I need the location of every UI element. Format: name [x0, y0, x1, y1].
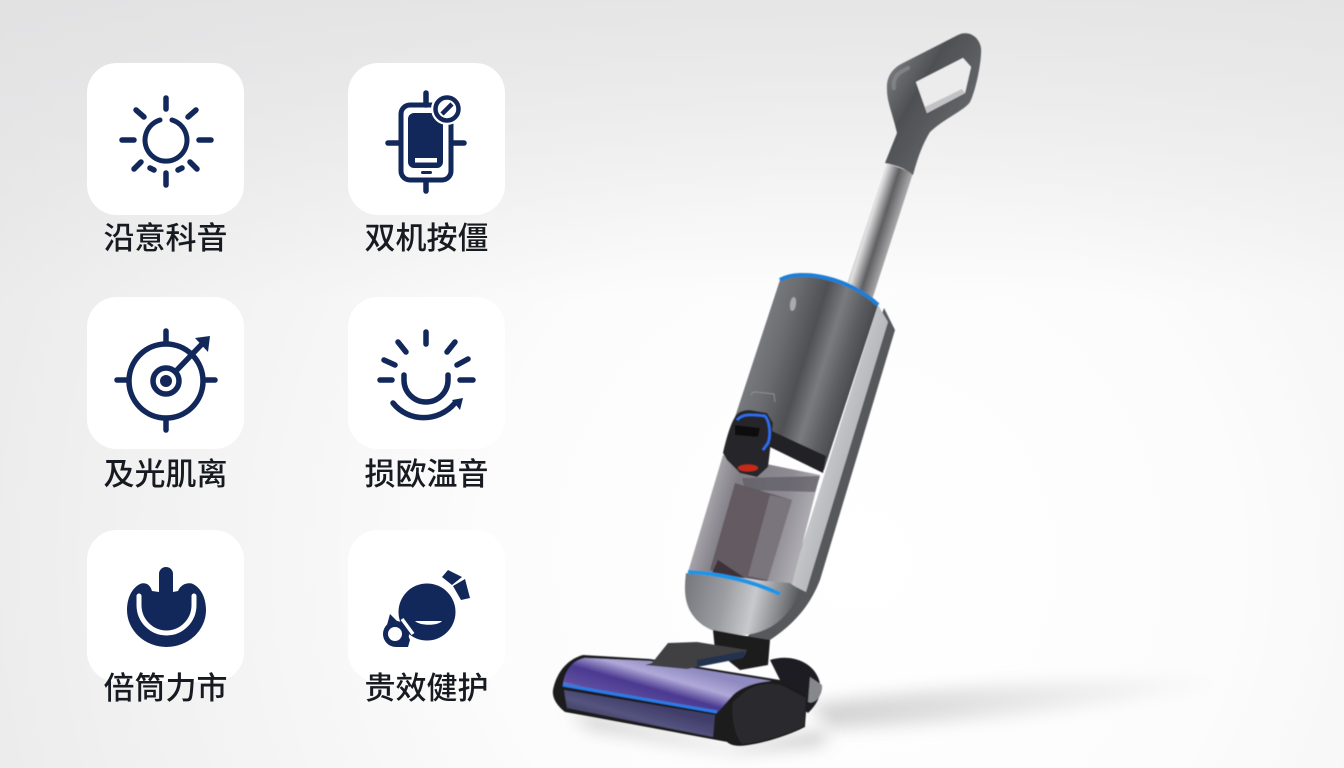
handle — [885, 33, 981, 175]
head ground shadow — [570, 712, 830, 752]
nozzle head — [553, 655, 807, 746]
wheel — [770, 658, 820, 713]
roller — [564, 690, 715, 737]
base — [685, 573, 800, 635]
label: 倍筒力市 — [104, 671, 228, 706]
panel: feature 1 — [87, 63, 244, 256]
neck joint — [713, 630, 770, 670]
icon: capsule — [383, 570, 470, 647]
panel: feature 3 — [87, 297, 244, 492]
label: 及光肌离 — [104, 457, 228, 492]
label: 贵效健护 — [364, 671, 488, 706]
panel: feature 4 — [348, 297, 505, 492]
back panel — [745, 308, 895, 640]
label: 双机按僵 — [364, 221, 488, 256]
panel: feature 2 — [348, 63, 505, 256]
dust cup — [688, 455, 820, 584]
inner cylinder — [710, 483, 792, 582]
purple cover — [563, 658, 772, 712]
icon: device — [388, 93, 464, 191]
clasp — [723, 410, 773, 477]
vacuum cleaner — [553, 33, 981, 752]
upper body — [735, 275, 878, 470]
black band — [768, 431, 826, 473]
floor shadow — [810, 679, 1230, 728]
label: 损欧温音 — [364, 457, 488, 492]
label: 沿意科音 — [104, 221, 228, 256]
icon: power — [127, 567, 206, 647]
icon: sun — [122, 98, 211, 185]
panel: feature 5 — [87, 530, 244, 706]
icon: target — [117, 331, 215, 430]
end cap — [732, 684, 806, 744]
neck plate — [645, 642, 747, 669]
icon: smile — [380, 332, 473, 418]
panel: feature 6 — [348, 530, 505, 706]
pole — [845, 163, 913, 300]
